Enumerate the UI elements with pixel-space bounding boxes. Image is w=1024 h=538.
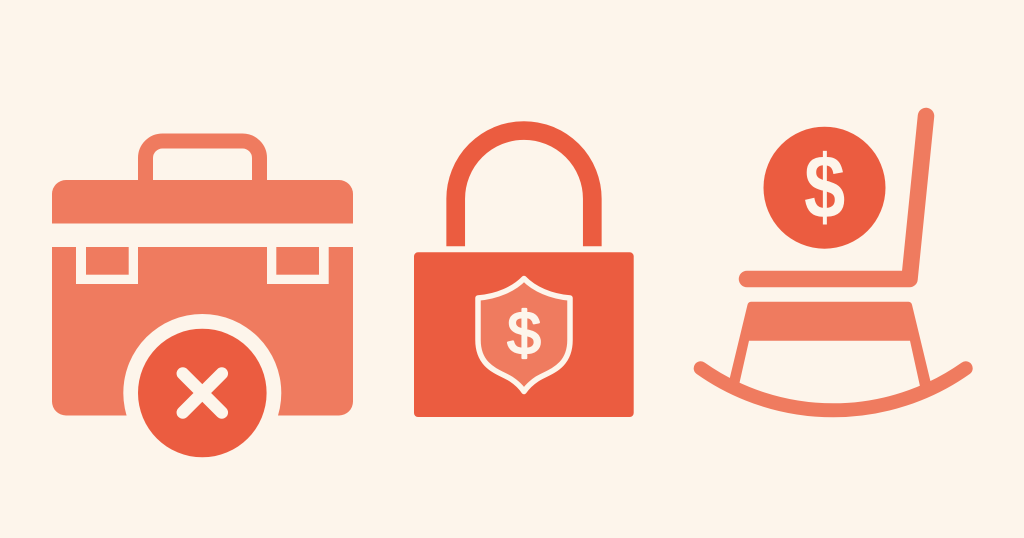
briefcase lid	[52, 180, 353, 224]
rocker	[701, 368, 966, 410]
shield dollar sign: $	[507, 300, 541, 366]
briefcase handle	[146, 141, 260, 181]
badge cutout ring	[123, 314, 281, 472]
coin	[764, 127, 886, 249]
padlock body	[414, 252, 634, 417]
chair back and seat	[747, 116, 926, 279]
padlock shackle	[456, 131, 592, 246]
icon: rocking chair with coin	[701, 116, 966, 410]
briefcase body	[52, 247, 353, 416]
icon: padlock with shield	[414, 131, 634, 417]
chair frame and legs	[729, 302, 931, 388]
shield	[478, 278, 570, 392]
left clasp	[76, 247, 138, 284]
right clasp	[267, 247, 329, 284]
x badge	[138, 329, 267, 457]
coin: $	[804, 138, 845, 238]
icon: briefcase with x badge	[52, 141, 353, 472]
